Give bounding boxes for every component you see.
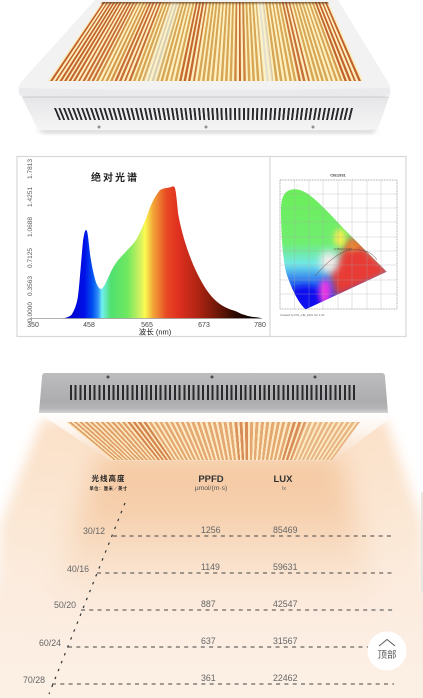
LED strips, lamp two [66,422,360,460]
table header: LUX: LUX [274,474,293,485]
row: 70/28: 22462 [273,673,298,683]
height axis dashed line [49,503,125,694]
y axis labels: 1.4251 [27,187,34,207]
row: 40/16: 1149 [201,562,220,572]
table header: PPFD: PPFD [198,474,224,485]
spectrum curve [62,186,262,318]
light cone [0,420,423,698]
row: 70/28: 70/28 [23,675,45,685]
lamp one housing [18,0,391,133]
x axis labels [27,322,266,329]
chart tiny labels: Created by KIN_CIE_1931 Ver 1.02 [280,313,325,317]
table header: LUX: lx [282,486,286,492]
table header: LUX [274,474,293,492]
row: 60/24: 637 [201,636,216,646]
y axis labels: 1.7813 [27,159,34,179]
grid [280,180,397,309]
chart title: 绝对光谱 [91,171,139,184]
lamp two housing [39,373,391,461]
x axis labels: 565 [141,322,153,329]
row: 50/20 [54,599,394,610]
row: 50/20: 42547 [273,599,298,609]
table header: PPFD: μmol/(m·s) [195,485,227,492]
row: 60/24: 60/24 [39,638,61,648]
y axis labels: 1.0688 [27,217,34,237]
row: 30/12: 30/12 [83,526,105,536]
row: 60/24 [39,636,394,648]
row: 60/24: 31567 [273,636,298,646]
horseshoe gamut [281,189,387,310]
row: 50/20: 50/20 [54,600,76,610]
absolute spectrum chart [27,159,266,336]
icon: chevron up [379,640,395,646]
panel: spectrum charts frame [17,156,406,336]
table header: light height: 光线高度 [92,473,126,483]
row: 40/16: 59631 [273,562,298,572]
row: 50/20: 887 [201,599,216,609]
y axis labels [27,159,34,322]
row: 30/12 [83,525,394,536]
row: 40/16: 40/16 [67,564,89,574]
CIE 1931 chromaticity chart [278,172,397,317]
vents, lamp two [70,385,356,400]
table header: light height [89,473,128,492]
chart title: CIE1931 [330,172,347,178]
x axis labels: 350 [27,322,39,329]
row: 70/28 [23,673,394,685]
row: 30/12: 1256 [201,525,221,535]
back to top button [368,632,406,670]
row: 40/16 [67,562,394,574]
table header: light height: 单位：厘米／英寸 [89,485,128,492]
table header: PPFD [195,474,227,492]
blackbody curve [315,250,377,276]
LED strips, lamp one [48,2,363,81]
back to top button: 顶部 [377,649,397,661]
row: 70/28: 361 [201,673,216,683]
scrollbar [421,492,423,592]
x axis title: 波长 (nm) [139,326,172,336]
x axis labels: 458 [83,322,95,329]
baseline axis [30,318,262,320]
charts and data table [16,156,423,694]
y axis labels: 0.0000 [27,302,34,322]
x axis labels: 780 [254,322,266,329]
CIE 1931 chromaticity chart: 0.4523,0.4096 [334,247,352,251]
vents, lamp one [54,108,355,120]
row: 30/12: 85469 [273,525,298,535]
y axis labels: 0.7125 [27,248,34,268]
x axis labels: 673 [198,322,210,329]
y axis labels: 0.3563 [27,276,34,296]
